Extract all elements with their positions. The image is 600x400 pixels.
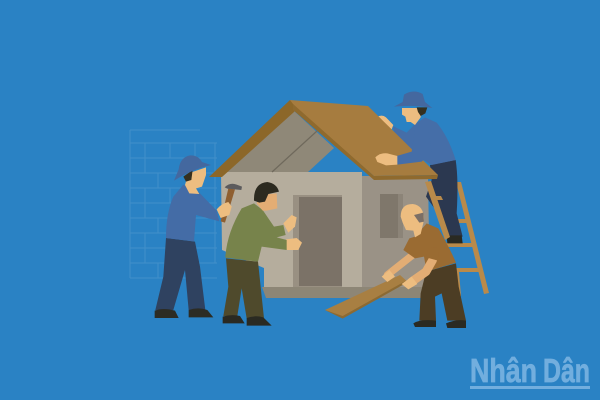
neck and face bbox=[185, 167, 206, 194]
worker with plank bbox=[325, 204, 466, 328]
face bbox=[257, 193, 277, 211]
near arm bbox=[412, 260, 433, 282]
worker pushing door bbox=[223, 182, 302, 326]
shirt bbox=[166, 185, 219, 241]
far hand bbox=[377, 116, 393, 130]
worker on ladder: near arm bbox=[375, 130, 432, 165]
hair bbox=[414, 213, 424, 223]
watermark: Nhân Dân bbox=[470, 352, 590, 389]
worker with hammer bbox=[155, 155, 242, 318]
left eave bbox=[209, 100, 298, 177]
watermark: Nhân Dân: Nhân bbox=[470, 352, 537, 389]
near hand bbox=[286, 238, 302, 250]
hair bbox=[183, 170, 193, 182]
hammer bbox=[221, 184, 242, 223]
trousers bbox=[223, 258, 264, 318]
front wall bbox=[221, 172, 362, 287]
trousers bbox=[155, 238, 205, 310]
roof panel bbox=[290, 100, 438, 180]
hat bbox=[394, 91, 432, 108]
far hand bbox=[283, 215, 297, 233]
shirt bbox=[225, 203, 287, 262]
house bbox=[221, 110, 430, 298]
ladder back rail and rungs bbox=[442, 182, 489, 296]
trousers bbox=[419, 263, 466, 321]
far arm bbox=[387, 255, 413, 275]
hair bbox=[417, 107, 427, 116]
base strip bbox=[262, 287, 430, 298]
shirt bbox=[403, 223, 456, 272]
ladder front rail and rungs bbox=[425, 181, 450, 240]
shoes bbox=[223, 315, 272, 326]
hand bbox=[217, 202, 232, 218]
shoe bbox=[447, 235, 463, 243]
door bbox=[293, 195, 342, 287]
plank bbox=[325, 275, 407, 319]
worker on ladder: body bbox=[377, 91, 463, 243]
near hand bbox=[375, 153, 397, 165]
side wall bbox=[362, 176, 430, 298]
near sleeve bbox=[426, 247, 439, 261]
trousers bbox=[426, 160, 463, 237]
window bbox=[380, 194, 403, 238]
shoes bbox=[413, 320, 466, 328]
near hand bbox=[402, 277, 417, 289]
head bbox=[401, 204, 424, 237]
far hand bbox=[382, 270, 395, 282]
neck and face bbox=[402, 108, 421, 125]
sleeve bbox=[397, 130, 432, 165]
background brick grid bbox=[130, 130, 217, 278]
shirt bbox=[393, 117, 456, 165]
gable bbox=[226, 110, 334, 172]
hat bbox=[174, 155, 211, 181]
hair bbox=[254, 182, 279, 203]
shoes bbox=[155, 308, 213, 318]
